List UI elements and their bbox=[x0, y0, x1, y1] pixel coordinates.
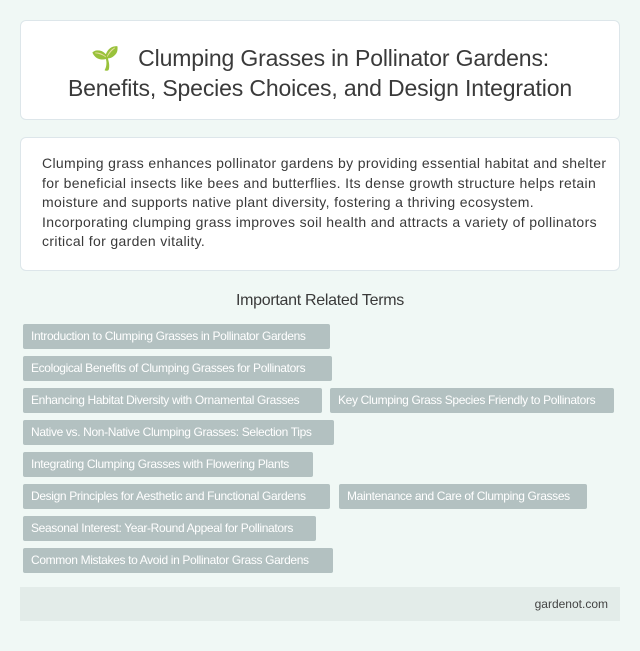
footer text: gardenot.com bbox=[535, 597, 608, 611]
title: 🌱 Clumping Grasses in Pollinator Gardens: bbox=[91, 45, 549, 71]
tag 7: Design Principles for Aesthetic and Functional Gardens bbox=[31, 489, 306, 503]
description text bbox=[42, 155, 606, 249]
description text: critical for garden vitality. bbox=[42, 233, 205, 249]
description text: moisture and supports native plant diversity, fostering a thriving ecosystem. bbox=[42, 194, 534, 210]
header card bbox=[20, 20, 620, 120]
tag 1 bbox=[23, 324, 330, 349]
footer bbox=[20, 587, 620, 621]
tag 2: Ecological Benefits of Clumping Grasses for Pollinators bbox=[31, 361, 305, 375]
tag 3: Enhancing Habitat Diversity with Ornamental Grasses bbox=[31, 393, 299, 407]
tag 8: Maintenance and Care of Clumping Grasses bbox=[347, 489, 570, 503]
description text: for beneficial insects like bees and butterflies. Its dense growth structure helps retain bbox=[42, 174, 596, 190]
tag 10 bbox=[23, 548, 333, 573]
tag 5 bbox=[23, 420, 334, 445]
tag 4 bbox=[330, 388, 614, 413]
tag 9 bbox=[23, 516, 316, 541]
description card bbox=[20, 137, 620, 271]
tag 5: Native vs. Non-Native Clumping Grasses: Selection Tips bbox=[31, 425, 312, 439]
title bbox=[68, 45, 572, 101]
terms heading: Important Related Terms bbox=[236, 292, 404, 309]
tag 6: Integrating Clumping Grasses with Flowering Plants bbox=[31, 457, 289, 471]
tag 1: Introduction to Clumping Grasses in Pollinator Gardens bbox=[31, 329, 306, 343]
tag 2 bbox=[23, 356, 332, 381]
tag 4: Key Clumping Grass Species Friendly to Pollinators bbox=[338, 393, 595, 407]
tag 9: Seasonal Interest: Year-Round Appeal for Pollinators bbox=[31, 521, 293, 535]
description text: Clumping grass enhances pollinator gardens by providing essential habitat and shelter bbox=[42, 155, 606, 171]
tag 8 bbox=[339, 484, 587, 509]
tag 3 bbox=[23, 388, 322, 413]
title: Benefits, Species Choices, and Design Integration bbox=[68, 75, 572, 101]
tag 6 bbox=[23, 452, 313, 477]
tag 7 bbox=[23, 484, 330, 509]
tag 10: Common Mistakes to Avoid in Pollinator Grass Gardens bbox=[31, 553, 309, 567]
description text: Incorporating clumping grass improves soil health and attracts a variety of pollinators bbox=[42, 214, 597, 230]
